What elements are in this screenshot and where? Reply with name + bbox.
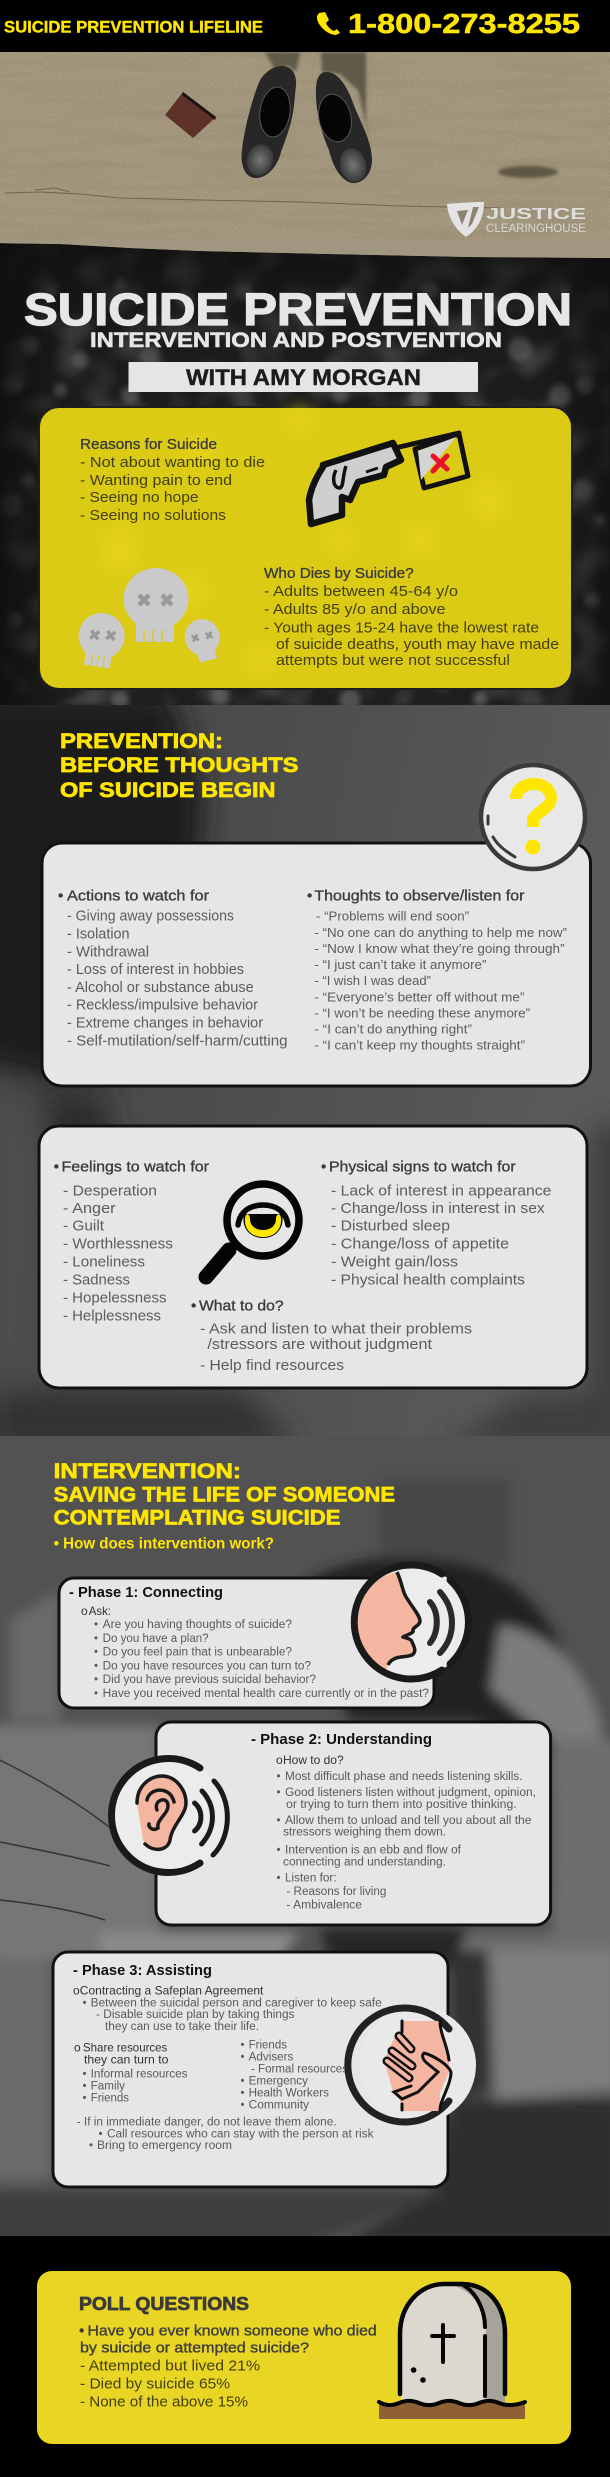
icon: gravestone — [379, 2284, 525, 2419]
phase 1 questions: Do you have a plan? — [103, 1633, 209, 1645]
phase 2 notes: Intervention is an ebb and flow of — [285, 1844, 462, 1856]
icon: ear — [111, 1758, 227, 1873]
share resources: informal: Family — [91, 2081, 125, 2093]
list: physical signs: • — [321, 1159, 326, 1176]
share resources: formal: Health Workers — [249, 2087, 329, 2099]
poll question: • — [79, 2323, 84, 2340]
poll answers: - None of the above 15% — [80, 2393, 248, 2410]
list: actions to watch for: - Alcohol or substance abuse — [67, 980, 254, 996]
heading: intervention: INTERVENTION: — [54, 1460, 241, 1483]
safeplan agreement notes: Between the suicidal person and caregiver to keep safe — [91, 1997, 382, 2009]
text: reasons for suicide: Reasons for Suicide — [80, 436, 217, 453]
text: reasons for suicide: - Wanting pain to end — [80, 472, 232, 489]
list: what to do: • — [191, 1297, 196, 1314]
list: thoughts to observe: - “I can’t keep my thoughts straight” — [314, 1038, 525, 1052]
phase 3 heading: - Phase 3: Assisting — [73, 1962, 212, 1979]
heading: prevention — [60, 730, 298, 802]
share resources: formal: • — [240, 2099, 245, 2111]
share resources: informal: • — [82, 2081, 87, 2093]
poll heading: POLL QUESTIONS — [79, 2294, 249, 2314]
immediate danger notes: - If in immediate danger, do not leave them alone. — [77, 2116, 337, 2128]
list: physical signs — [321, 1159, 551, 1288]
phase 1 heading: - Phase 1: Connecting — [69, 1584, 223, 1601]
text: who dies by suicide: - Youth ages 15-24 have the lowest rate — [264, 620, 539, 637]
immediate danger notes: Bring to emergency room — [97, 2140, 232, 2152]
share resources: informal: • — [82, 2069, 87, 2081]
icon: wallet — [165, 92, 216, 138]
poll question: by suicide or attempted suicide? — [80, 2339, 309, 2356]
phase 2 notes: Good listeners listen without judgment, opinion, — [285, 1787, 536, 1799]
text: who dies by suicide: of suicide deaths, youth may have made — [276, 636, 559, 653]
list: thoughts to observe: - “I won’t be needing these anymore” — [314, 1006, 530, 1020]
list: actions to watch for: - Reckless/impulsive behavior — [67, 998, 258, 1014]
phase 2 notes: or trying to turn them into positive thinking. — [286, 1799, 517, 1811]
share resources: formal: • — [240, 2052, 245, 2064]
text: reasons for suicide: - Seeing no solutions — [80, 507, 226, 524]
list: actions to watch for: - Giving away possessions — [67, 909, 234, 925]
icon: skulls — [74, 568, 225, 670]
list: actions to watch for — [58, 888, 288, 1050]
list: feelings to watch for: - Loneliness — [63, 1255, 145, 1271]
icon: phone — [317, 12, 340, 35]
icon: speaking profile — [354, 1565, 468, 1679]
list: physical signs: - Lack of interest in appearance — [331, 1183, 551, 1199]
share resources: formal: • — [240, 2040, 245, 2052]
immediate danger notes: • — [89, 2140, 93, 2152]
panel: actions and thoughts — [42, 843, 590, 1086]
list: feelings to watch for: - Desperation — [63, 1183, 157, 1199]
panel: feelings, physical signs and what to do — [39, 1126, 587, 1388]
phase 2 notes: Listen for: — [285, 1872, 337, 1884]
share resources: informal: • — [82, 2093, 87, 2105]
background: dark bokeh photo — [0, 240, 610, 711]
immediate danger notes: • — [98, 2128, 103, 2140]
poll answers: - Died by suicide 65% — [80, 2375, 230, 2392]
share resources: formal: • — [240, 2076, 245, 2088]
list: what to do: - Ask and listen to what their problems — [200, 1321, 472, 1337]
heading: intervention: CONTEMPLATING SUICIDE — [54, 1506, 340, 1529]
icon: question mark — [481, 765, 585, 869]
list: feelings to watch for: - Guilt — [63, 1219, 104, 1235]
heading: intervention — [54, 1460, 395, 1552]
list: what to do: /stressors are without judgment — [207, 1337, 432, 1353]
list: feelings to watch for: - Worthlessness — [63, 1237, 173, 1253]
text: who dies by suicide: - Adults between 45-64 y/o — [264, 583, 458, 600]
phase 2 notes: connecting and understanding. — [283, 1856, 446, 1868]
list: thoughts to observe: - “No one can do anything to help me now” — [314, 926, 567, 940]
phase 1 questions: Are you having thoughts of suicide? — [103, 1619, 292, 1631]
list: thoughts to observe: - “Now I know what they’re going through” — [314, 942, 565, 956]
share resources: informal: they can turn to — [84, 2053, 169, 2067]
phase 2 notes: • — [276, 1872, 281, 1884]
text: who dies by suicide: - Adults 85 y/o and above — [264, 601, 446, 618]
list: thoughts to observe: - “Everyone’s better off without me” — [314, 990, 524, 1004]
heading: intervention: SAVING THE LIFE OF SOMEONE — [54, 1484, 395, 1507]
title block — [24, 284, 572, 392]
list: physical signs: - Change/loss of appetite — [331, 1237, 509, 1253]
phase 1 questions: Have you received mental health care currently or in the past? — [103, 1688, 429, 1700]
list: what to do: - Help find resources — [200, 1358, 344, 1374]
lifeline number: 1-800-273-8255 — [348, 8, 580, 39]
list: feelings to watch for: - Helplessness — [63, 1308, 161, 1324]
background: intervention section photo — [0, 1436, 610, 2246]
text: reasons for suicide — [80, 436, 265, 524]
list: feelings to watch for — [54, 1159, 209, 1324]
share resources: formal: Advisers — [249, 2052, 294, 2064]
share resources: informal: Informal resources — [91, 2069, 188, 2081]
panel: phase 3 assisting — [53, 1952, 448, 2187]
list: thoughts to observe — [307, 888, 567, 1052]
share resources: formal: • — [240, 2087, 245, 2099]
list: feelings to watch for: - Sadness — [63, 1272, 130, 1288]
icon: helping hands — [348, 2007, 476, 2123]
background: sand photo — [0, 52, 610, 258]
presenter name: WITH AMY MORGAN — [186, 365, 421, 390]
phase 2 notes: o — [276, 1753, 283, 1767]
main title: SUICIDE PREVENTION — [24, 284, 572, 335]
lifeline label: SUICIDE PREVENTION LIFELINE — [4, 18, 263, 36]
icon: magnifying glass with eye — [206, 1184, 299, 1277]
phase 1 questions — [81, 1604, 429, 1700]
phase 1 questions: • — [94, 1674, 98, 1686]
phase 2 notes: Allow them to unload and tell you about all the — [285, 1815, 532, 1827]
phase 1 questions: Did you have previous suicidal behavior? — [103, 1674, 316, 1686]
phase 1 questions: • — [94, 1647, 98, 1659]
icon: revolver with flag — [309, 433, 468, 524]
safeplan agreement notes: they can use to take their life. — [105, 2021, 259, 2033]
safeplan agreement notes: o — [73, 1983, 80, 1997]
phase 2 heading: - Phase 2: Understanding — [251, 1731, 432, 1748]
panel: poll questions — [37, 2271, 571, 2444]
text: reasons for suicide: - Seeing no hope — [80, 489, 198, 506]
panel: phase 2 understanding — [156, 1722, 551, 1925]
list: thoughts to observe: - “I just can’t take it anymore” — [314, 958, 486, 972]
list: feelings to watch for: Feelings to watch for — [62, 1159, 209, 1176]
immediate danger notes: Call resources who can stay with the person at risk — [107, 2128, 374, 2140]
phase 1 questions: • — [94, 1619, 98, 1631]
list: thoughts to observe: Thoughts to observe/listen for — [314, 888, 524, 905]
share resources: formal: Community — [249, 2099, 309, 2111]
phase 1 questions: Ask: — [89, 1604, 111, 1618]
panel: phase 1 connecting — [59, 1578, 434, 1708]
poll question: Have you ever known someone who died — [88, 2323, 377, 2340]
logo: Justice Clearinghouse: CLEARINGHOUSE — [486, 223, 586, 235]
background: prevention section photo — [0, 690, 610, 1450]
phase 2 notes: - Ambivalence — [286, 1900, 362, 1912]
safeplan agreement notes: Contracting a Safeplan Agreement — [80, 1983, 264, 1997]
safeplan agreement notes: - Disable suicide plan by taking things — [96, 2009, 295, 2021]
list: physical signs: - Disturbed sleep — [331, 1219, 450, 1235]
text: reasons for suicide: - Not about wanting to die — [80, 454, 265, 471]
phase 2 notes: Most difficult phase and needs listening skills. — [285, 1771, 523, 1783]
safeplan agreement notes — [73, 1983, 382, 2033]
list: actions to watch for: - Loss of interest in hobbies — [67, 962, 244, 978]
phase 2 notes: stressors weighing them down. — [283, 1826, 446, 1838]
phase 2 notes: • — [276, 1815, 281, 1827]
list: thoughts to observe: - “I can’t do anything right” — [314, 1022, 472, 1036]
list: actions to watch for: - Withdrawal — [67, 944, 149, 960]
phase 1 questions: • — [94, 1688, 98, 1700]
list: feelings to watch for: - Hopelessness — [63, 1290, 166, 1306]
text: who dies by suicide: Who Dies by Suicide? — [264, 565, 414, 582]
share resources: informal: o — [74, 2041, 81, 2055]
text: who dies by suicide: attempts but were not successful — [276, 652, 510, 669]
poll question — [79, 2323, 377, 2356]
list: actions to watch for: - Isolation — [67, 926, 130, 942]
subtitle: INTERVENTION AND POSTVENTION — [90, 329, 502, 352]
phase 2 notes: How to do? — [283, 1753, 344, 1767]
phase 2 notes — [276, 1753, 536, 1912]
subheading: how does intervention work: • How does intervention work? — [54, 1535, 274, 1552]
list: what to do: What to do? — [199, 1297, 284, 1314]
share resources: informal: Friends — [91, 2093, 129, 2105]
icon: shoes — [242, 66, 372, 185]
list: what to do — [191, 1297, 472, 1374]
phase 2 notes: • — [276, 1844, 281, 1856]
share resources: informal — [74, 2041, 188, 2105]
phase 1 questions: Do you feel pain that is unbearable? — [103, 1647, 292, 1659]
list: feelings to watch for: • — [54, 1159, 59, 1176]
phase 1 questions: • — [94, 1660, 98, 1672]
phase 1 questions: Do you have resources you can turn to? — [103, 1660, 311, 1672]
heading: prevention: BEFORE THOUGHTS — [60, 754, 298, 777]
safeplan agreement notes: • — [82, 1997, 87, 2009]
list: physical signs: Physical signs to watch for — [329, 1159, 516, 1176]
heading: prevention: PREVENTION: — [60, 730, 223, 753]
phase 1 questions: • — [94, 1633, 98, 1645]
share resources: formal: - Formal resources — [251, 2064, 348, 2076]
heading: prevention: OF SUICIDE BEGIN — [60, 779, 276, 802]
phase 2 notes: - Reasons for living — [286, 1886, 386, 1898]
share resources: formal — [240, 2040, 348, 2111]
phase 2 notes: • — [276, 1787, 281, 1799]
list: thoughts to observe: • — [307, 888, 312, 905]
poll answers: - Attempted but lived 21% — [80, 2358, 260, 2375]
poll answers — [80, 2358, 260, 2410]
list: physical signs: - Change/loss in interest in sex — [331, 1201, 546, 1217]
share resources: informal: Share resources — [83, 2041, 167, 2055]
phase 1 questions: o — [81, 1604, 88, 1618]
list: actions to watch for: - Extreme changes in behavior — [67, 1016, 263, 1032]
list: physical signs: - Weight gain/loss — [331, 1255, 458, 1271]
logo: Justice Clearinghouse — [447, 202, 586, 237]
list: physical signs: - Physical health complaints — [331, 1272, 525, 1288]
immediate danger notes — [77, 2116, 374, 2152]
phase 2 notes: • — [276, 1771, 281, 1783]
share resources: formal: Emergency — [249, 2076, 308, 2088]
list: actions to watch for: - Self-mutilation/self-harm/cutting — [67, 1034, 288, 1050]
list: actions to watch for: • — [58, 888, 63, 905]
list: thoughts to observe: - “Problems will end soon” — [316, 910, 469, 924]
share resources: formal: Friends — [249, 2040, 287, 2052]
list: thoughts to observe: - “I wish I was dead” — [314, 974, 431, 988]
header bar: lifeline — [0, 0, 610, 52]
text: who dies by suicide — [264, 565, 559, 669]
list: actions to watch for: Actions to watch for — [67, 888, 209, 905]
logo: Justice Clearinghouse: JUSTICE — [486, 206, 586, 223]
list: feelings to watch for: - Anger — [63, 1201, 116, 1217]
panel: reasons and who dies — [39, 406, 572, 689]
presenter bar — [128, 362, 478, 392]
